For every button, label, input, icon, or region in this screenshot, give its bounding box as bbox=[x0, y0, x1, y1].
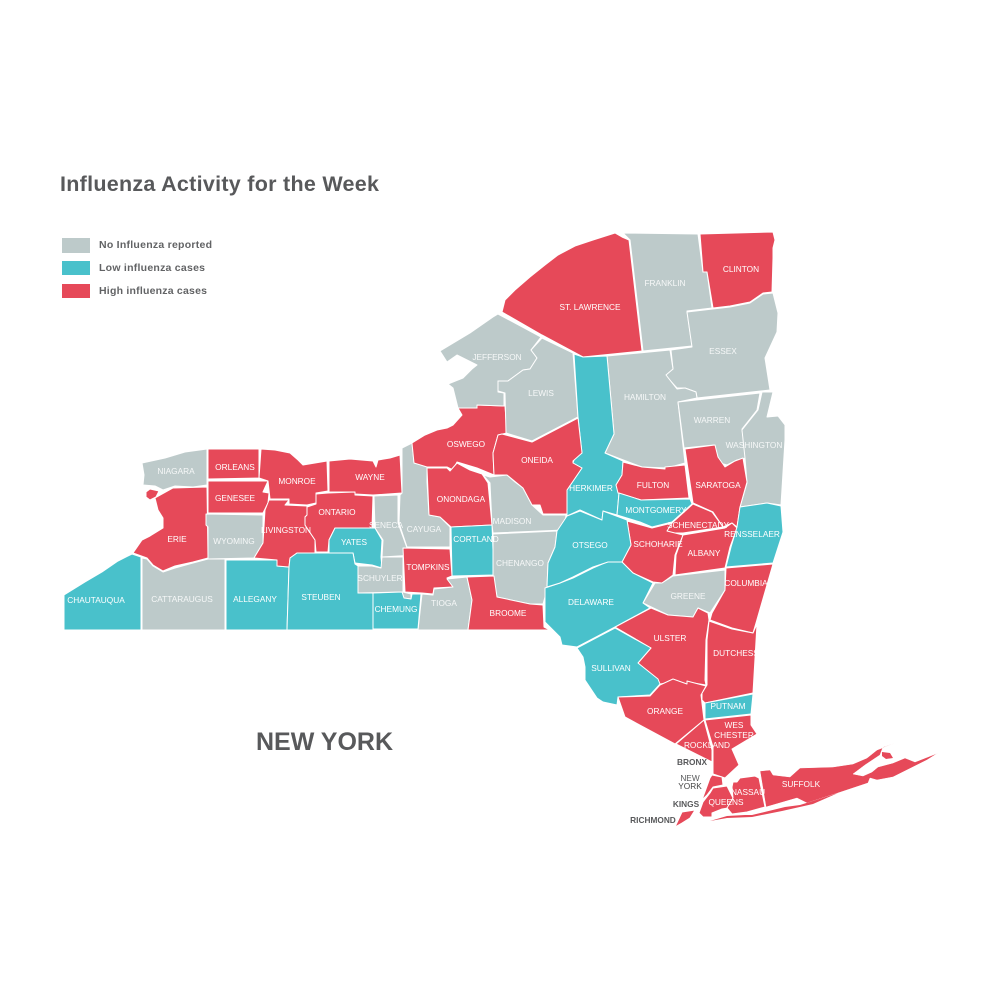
county: Delaware bbox=[545, 562, 653, 647]
county: Rockland bbox=[676, 720, 712, 762]
label: Livingston: LIVINGSTON bbox=[261, 525, 311, 535]
label: Montgomery: MONTGOMERY bbox=[625, 505, 687, 515]
county: Hamilton bbox=[605, 350, 697, 468]
county: Nassau bbox=[727, 776, 765, 814]
legend swatch: high bbox=[62, 284, 90, 298]
Shelter Island bbox=[882, 752, 893, 759]
county: Rensselaer bbox=[726, 503, 783, 567]
label: Hamilton: HAMILTON bbox=[624, 392, 666, 402]
state name heading: NEW YORK bbox=[256, 728, 393, 756]
label: Warren: WARREN bbox=[694, 415, 730, 425]
county: Richmond bbox=[675, 810, 695, 827]
county: Erie bbox=[133, 487, 208, 571]
label: Schenectady: SCHENECTADY bbox=[667, 520, 729, 530]
county: Monroe bbox=[259, 449, 328, 505]
label: Kings: KINGS bbox=[673, 799, 700, 809]
county: Schuyler bbox=[358, 557, 411, 599]
county: Jefferson bbox=[440, 314, 541, 408]
label: Tompkins: TOMPKINS bbox=[406, 562, 450, 572]
county: Cattaraugus bbox=[142, 558, 225, 630]
label: Niagara: NIAGARA bbox=[157, 466, 195, 476]
county: Niagara bbox=[142, 449, 207, 490]
county: Tompkins bbox=[403, 548, 453, 594]
county: Clinton bbox=[700, 232, 775, 308]
county: Saratoga bbox=[685, 445, 747, 527]
title: Influenza Activity for the Week bbox=[60, 172, 379, 196]
label: Bronx: BRONX bbox=[677, 757, 707, 767]
map: county labels bbox=[67, 264, 821, 807]
county: Suffolk bbox=[760, 743, 938, 807]
label: Chautauqua: CHAUTAUQUA bbox=[67, 595, 125, 605]
label: Chenango: CHENANGO bbox=[496, 558, 545, 568]
label: Sullivan: SULLIVAN bbox=[591, 663, 631, 673]
label: Columbia: COLUMBIA bbox=[724, 578, 768, 588]
county: Broome bbox=[467, 576, 550, 630]
county: Chautauqua bbox=[64, 554, 141, 630]
label: Schuyler: SCHUYLER bbox=[357, 573, 403, 583]
label: Allegany: ALLEGANY bbox=[233, 594, 277, 604]
label: Albany: ALBANY bbox=[688, 548, 721, 558]
label: Wayne: WAYNE bbox=[355, 472, 385, 482]
county: Bronx / New York bbox=[702, 775, 723, 800]
county: Oswego bbox=[412, 405, 507, 475]
county: Steuben bbox=[287, 553, 373, 630]
county: Livingston bbox=[254, 500, 315, 567]
label: Franklin: FRANKLIN bbox=[644, 278, 686, 288]
label: Broome: BROOME bbox=[490, 608, 527, 618]
legend swatch: low bbox=[62, 261, 90, 275]
county: Essex bbox=[665, 293, 778, 398]
label: Oneida: ONEIDA bbox=[521, 455, 553, 465]
label: Essex: ESSEX bbox=[709, 346, 737, 356]
label: Lewis: LEWIS bbox=[528, 388, 554, 398]
county: Cayuga bbox=[399, 443, 450, 547]
label: Queens: QUEENS bbox=[708, 797, 744, 807]
legend label: no influenza: No Influenza reported bbox=[99, 239, 212, 251]
label: St. Lawrence: ST. LAWRENCE bbox=[559, 302, 621, 312]
label: Westchester, line 2: CHESTER bbox=[714, 730, 754, 740]
county: Lewis bbox=[498, 338, 578, 441]
label: Suffolk: SUFFOLK bbox=[782, 779, 821, 789]
label: Chemung: CHEMUNG bbox=[375, 604, 417, 614]
county: Montgomery bbox=[617, 493, 692, 527]
county: Chemung bbox=[373, 592, 421, 629]
county: Albany bbox=[675, 523, 737, 575]
legend swatch: no influenza bbox=[62, 238, 90, 253]
label: Putnam: PUTNAM bbox=[710, 701, 746, 711]
county: Yates bbox=[329, 528, 382, 568]
label: Ulster: ULSTER bbox=[654, 633, 686, 643]
label: Madison: MADISON bbox=[493, 516, 531, 526]
label: Oswego: OSWEGO bbox=[447, 439, 486, 449]
county: Orange bbox=[618, 679, 706, 744]
county: Franklin bbox=[623, 233, 712, 351]
county: Seneca bbox=[374, 495, 415, 557]
county: Sullivan bbox=[577, 628, 660, 705]
legend label: low: Low influenza cases bbox=[99, 262, 205, 274]
county: St. Lawrence bbox=[502, 233, 642, 357]
label: Delaware: DELAWARE bbox=[568, 597, 614, 607]
county: Wayne bbox=[329, 455, 402, 495]
label: Erie: ERIE bbox=[167, 534, 187, 544]
label: Rockland: ROCKLAND bbox=[684, 740, 730, 750]
label: Steuben: STEUBEN bbox=[301, 592, 341, 602]
label: Fulton: FULTON bbox=[637, 480, 669, 490]
label: Dutchess: DUTCHESS bbox=[713, 648, 759, 658]
county: Tioga bbox=[418, 577, 472, 630]
county: Warren bbox=[678, 393, 760, 465]
legend bbox=[62, 238, 212, 298]
label: Rensselaer: RENSSELAER bbox=[724, 529, 780, 539]
label: Otsego: OTSEGO bbox=[572, 540, 608, 550]
county: Onondaga bbox=[427, 463, 492, 527]
label: Genesee: GENESEE bbox=[215, 493, 256, 503]
county: Herkimer bbox=[567, 354, 623, 520]
county: Cortland bbox=[451, 525, 494, 576]
label: Monroe: MONROE bbox=[278, 476, 316, 486]
county: Ontario bbox=[305, 492, 373, 552]
county: Westchester bbox=[705, 715, 757, 778]
label: Herkimer: HERKIMER bbox=[569, 483, 613, 493]
label: Yates: YATES bbox=[341, 537, 367, 547]
county: Wyoming bbox=[206, 514, 263, 559]
county: Schoharie bbox=[622, 521, 683, 583]
county: Putnam bbox=[705, 694, 753, 719]
label: Clinton: CLINTON bbox=[723, 264, 759, 274]
label: Nassau: NASSAU bbox=[731, 787, 765, 797]
county: Schenectady bbox=[667, 504, 723, 533]
label: Westchester, line 1: WES bbox=[725, 720, 744, 730]
label: Tioga: TIOGA bbox=[431, 598, 457, 608]
county: Chenango bbox=[493, 531, 557, 604]
label: Saratoga: SARATOGA bbox=[695, 480, 741, 490]
label: Schoharie: SCHOHARIE bbox=[633, 539, 683, 549]
county: Washington bbox=[740, 392, 785, 507]
Long Island barrier beach bbox=[710, 793, 838, 821]
label: Cattaraugus: CATTARAUGUS bbox=[151, 594, 213, 604]
label: Orange: ORANGE bbox=[647, 706, 683, 716]
label: New York, line 2: YORK bbox=[678, 781, 702, 791]
label: Jefferson: JEFFERSON bbox=[472, 352, 522, 362]
legend label: high: High influenza cases bbox=[99, 285, 207, 297]
label: Cayuga: CAYUGA bbox=[407, 524, 442, 534]
county: Greene bbox=[643, 570, 725, 617]
label: Seneca: SENECA bbox=[369, 520, 404, 530]
label: Richmond: RICHMOND bbox=[630, 815, 676, 825]
label: Greene: GREENE bbox=[670, 591, 706, 601]
label: Orleans: ORLEANS bbox=[215, 462, 255, 472]
county: Dutchess bbox=[702, 621, 757, 703]
county: Oneida bbox=[493, 418, 582, 514]
county: Otsego bbox=[547, 511, 631, 587]
label: Wyoming: WYOMING bbox=[213, 536, 255, 546]
label: Washington: WASHINGTON bbox=[726, 440, 782, 450]
county: Genesee bbox=[208, 481, 269, 513]
county: Madison bbox=[483, 475, 566, 533]
label: Cortland: CORTLAND bbox=[453, 534, 499, 544]
county: Ulster bbox=[615, 608, 709, 685]
county: Columbia bbox=[710, 564, 773, 633]
county: Allegany bbox=[226, 560, 289, 630]
county: Erie island bbox=[146, 489, 159, 500]
label: New York, line 1: NEW bbox=[680, 773, 700, 783]
county: Orleans bbox=[208, 449, 259, 479]
label: Onondaga: ONONDAGA bbox=[437, 494, 486, 504]
county: Fulton bbox=[616, 462, 689, 500]
label: Ontario: ONTARIO bbox=[318, 507, 356, 517]
map: county shapes bbox=[64, 232, 938, 827]
county: Queens / Kings bbox=[699, 786, 733, 817]
